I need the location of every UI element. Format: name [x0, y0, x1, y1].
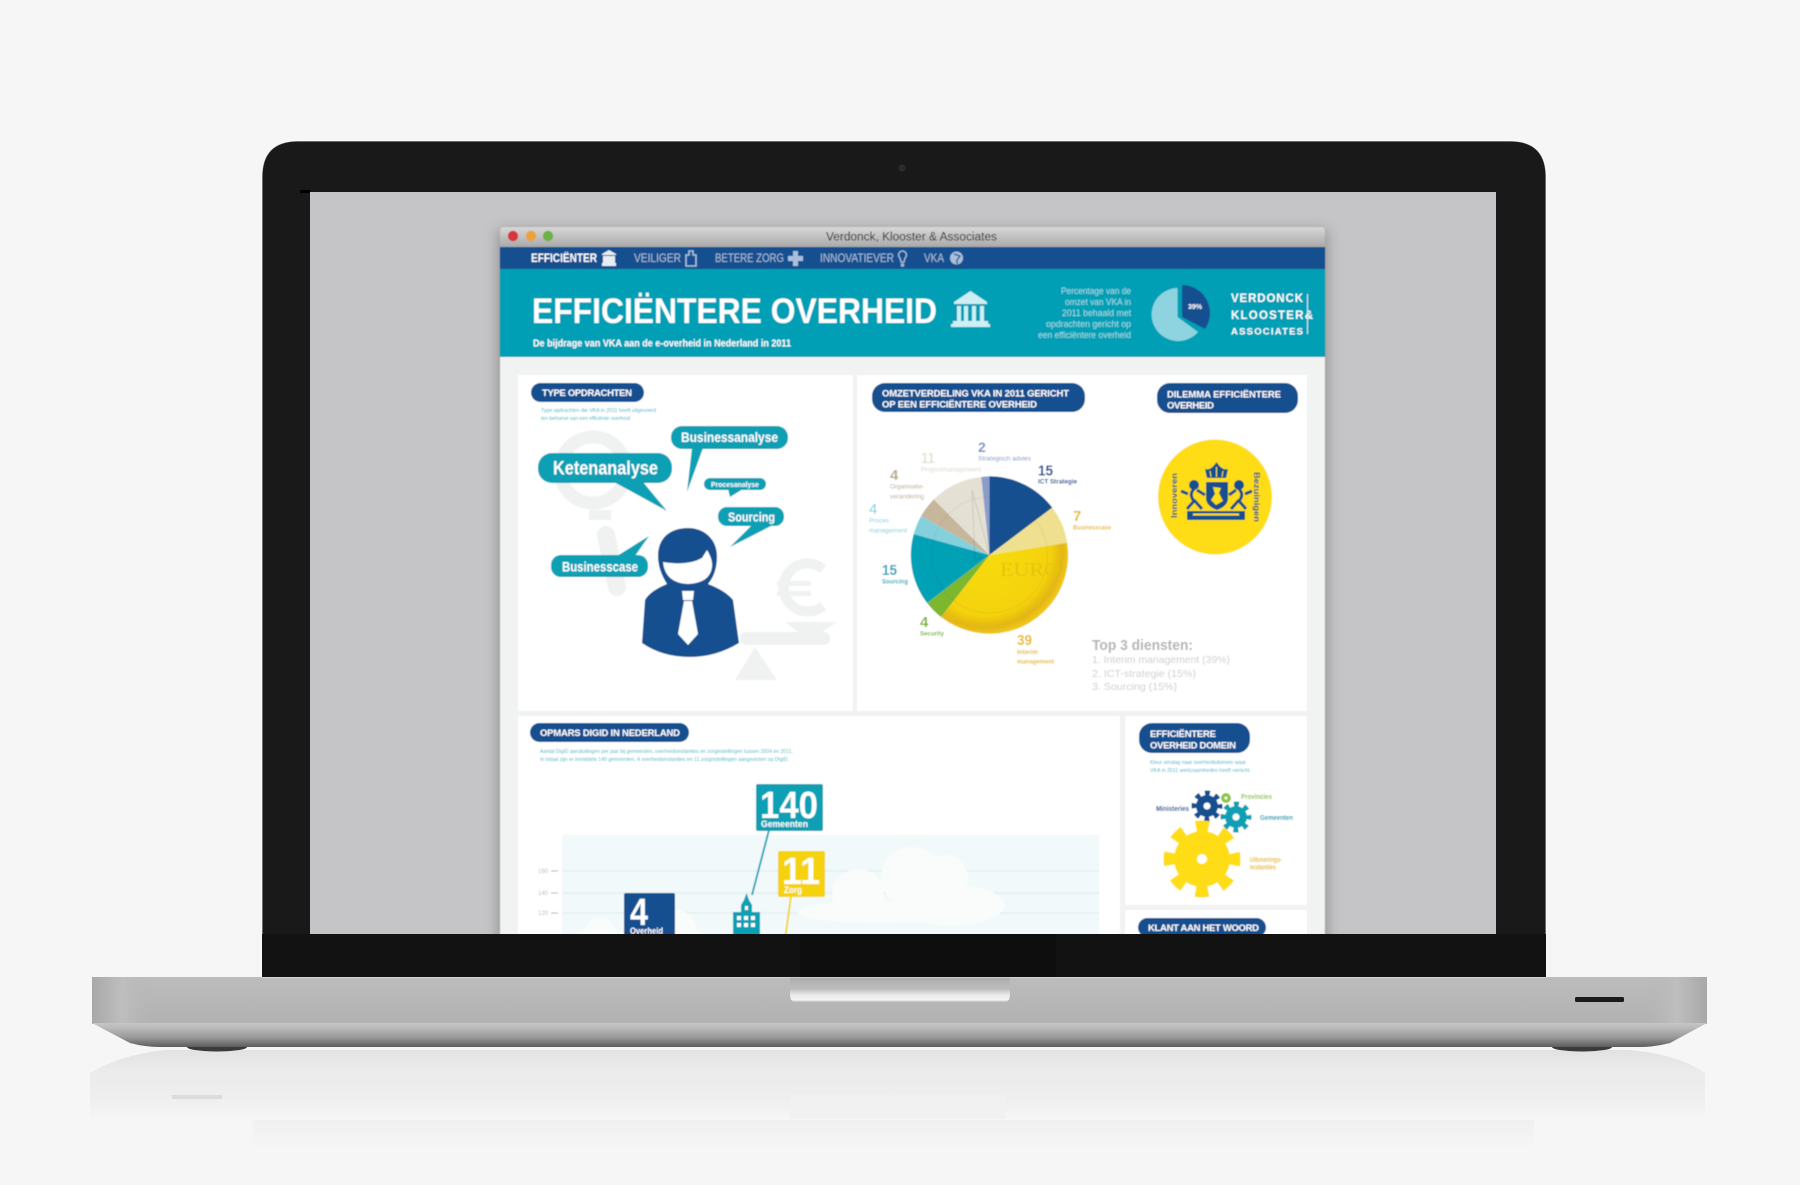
callout: 4 overheid — [624, 892, 675, 943]
callout: 4 overheid: 4 — [630, 892, 648, 934]
icon: gear yellow — [1170, 827, 1234, 891]
icon: gear teal — [1224, 804, 1248, 830]
axis labels — [538, 869, 558, 917]
icon: nav lock — [686, 251, 696, 266]
camera — [898, 164, 906, 172]
label: interim management — [1017, 632, 1055, 666]
heading pill: opmars digid — [530, 723, 689, 742]
navigation bar: VKA — [924, 253, 944, 265]
speech bubble: ketenanalyse: Ketenanalyse — [553, 458, 658, 480]
label: projectmanagement: 11 — [921, 450, 935, 467]
speech bubble: procesanalyse — [704, 478, 766, 497]
label: sourcing: Sourcing — [882, 578, 908, 586]
intro text: Aantal DigiD aansluitingen per jaar bij gemeenten, overheidsinstanties en zorginstellingen tussen 2004 en 2011. — [540, 749, 793, 755]
slice: sourcing — [911, 534, 990, 603]
slice: strategisch advies — [981, 476, 990, 555]
label: strategisch advies: 2 — [978, 439, 986, 455]
icon: nav globe — [950, 252, 963, 264]
callout: 11 zorg: Zorg — [784, 885, 802, 895]
callout: 11 zorg — [778, 851, 825, 940]
heading pill: domein: EFFICIËNTERE — [1150, 729, 1216, 740]
label: proces management: management — [869, 528, 907, 534]
icon: nav temple — [602, 250, 616, 266]
panel: omzetverdeling — [857, 375, 1307, 711]
top 3 services: 2. ICT-strategie (15%) — [1092, 668, 1196, 680]
percentage description: 2011 behaald met — [1062, 308, 1131, 318]
label: security: Security — [920, 630, 944, 638]
panel: efficiëntere overheid domein — [1125, 716, 1307, 905]
label: interim management: 39 — [1017, 632, 1032, 649]
label: businesscase: Businesscase — [1073, 524, 1111, 532]
slice: proces management — [914, 516, 990, 555]
navigation bar: BETERE ZORG — [715, 253, 784, 265]
label: proces management: Proces — [869, 518, 890, 524]
label: ICT strategie: ICT Strategie — [1038, 478, 1077, 486]
gear labels: Uitvoerings- — [1250, 855, 1282, 864]
gear labels: instanties — [1250, 862, 1276, 872]
browser window — [500, 227, 1325, 956]
heading pill: domein — [1139, 723, 1250, 753]
axis labels: 140 — [538, 891, 549, 897]
callout: 140 gemeenten — [752, 784, 823, 895]
label: businesscase — [1073, 508, 1111, 532]
label: ICT strategie: 15 — [1038, 462, 1053, 480]
window page background — [500, 356, 1326, 934]
header band — [500, 269, 1325, 357]
hinge notch — [790, 976, 1010, 1002]
logo: VERDONCK — [1231, 293, 1304, 305]
intro text: Kleur omslag naar overheidsdomein waar — [1150, 760, 1246, 766]
icon: nav bulb — [899, 251, 906, 266]
label: projectmanagement — [921, 450, 981, 474]
heading pill: omzetverdeling — [872, 383, 1085, 412]
title bar — [500, 227, 1325, 247]
label: businesscase: 7 — [1073, 508, 1081, 525]
speech bubble: procesanalyse: Procesanalyse — [711, 480, 759, 489]
intro text — [541, 408, 656, 422]
axis labels: 160 — [538, 869, 549, 875]
pie labels — [869, 439, 1111, 666]
lion right — [1229, 480, 1252, 509]
callout: 4 overheid: Overheid — [630, 926, 663, 936]
foot right — [1552, 1042, 1612, 1052]
slice: security — [927, 555, 990, 617]
pie chart: EURO — [1000, 559, 1060, 581]
speech bubble: businessanalyse — [671, 426, 788, 492]
speech bubble: sourcing — [718, 507, 784, 547]
label: organisatieverandering: Organisatie- — [890, 484, 924, 490]
slice: organisatieverandering — [921, 499, 990, 555]
speech bubble: businessanalyse: Businessanalyse — [681, 429, 778, 445]
screen — [300, 190, 1496, 950]
laptop bezel — [262, 141, 1546, 977]
heading pill: dilemma: OVERHEID — [1167, 400, 1214, 412]
heading pill: domein: OVERHEID DOMEIN — [1150, 740, 1236, 752]
callout: 140 gemeenten: Gemeenten — [761, 819, 808, 829]
speech bubble: ketenanalyse — [538, 453, 672, 511]
rotated text: bezuinigen: Bezuinigen — [1252, 472, 1261, 522]
speech bubble: sourcing: Sourcing — [728, 510, 775, 524]
label: interim management: management — [1017, 658, 1055, 666]
gear labels — [1156, 792, 1293, 872]
icon: building — [733, 893, 760, 940]
navigation bar: EFFICIËNTER — [531, 252, 598, 265]
panel: klant aan het woord — [1125, 910, 1307, 956]
background icon: magnifier — [560, 437, 626, 587]
percentage description: omzet van VKA in — [1065, 297, 1131, 307]
background icon: euro on scale — [735, 564, 837, 680]
label: sourcing — [882, 562, 908, 586]
clouds — [577, 847, 1005, 954]
heading pill: type opdrachten — [531, 383, 644, 402]
laptop reflection — [90, 1050, 1705, 1150]
heading pill: omzetverdeling: OP EEN EFFICIËNTERE OVERHEID — [882, 400, 1037, 410]
label: proces management: 4 — [869, 501, 877, 518]
label: organisatieverandering: 4 — [890, 467, 899, 484]
yellow seal: dilemma coat of arms — [1158, 440, 1272, 554]
label: ICT strategie — [1038, 462, 1077, 486]
icon: gear green — [1221, 793, 1231, 803]
speech bubble: businesscase — [551, 536, 649, 577]
heading pill: klant aan het woord — [1138, 918, 1266, 937]
icon: temple — [951, 291, 990, 327]
label: organisatieverandering — [890, 467, 924, 500]
label: security: 4 — [920, 614, 929, 631]
slice: ICT strategie — [990, 476, 1052, 555]
top 3 services — [1092, 637, 1230, 693]
label: sourcing: 15 — [882, 562, 897, 579]
axis labels: 120 — [538, 911, 549, 917]
crown — [1205, 462, 1228, 478]
top 3 services: 3. Sourcing (15%) — [1092, 681, 1177, 693]
top 3 services: 1. Interim management (39%) — [1092, 654, 1230, 666]
gear labels: Gemeenten — [1260, 813, 1293, 822]
mini pie chart 39 percent: 39% — [1188, 304, 1203, 311]
subtitle: De bijdrage van VKA aan de e-overheid in Nederland in 2011 — [533, 338, 791, 350]
logo: KLOOSTER& — [1231, 310, 1313, 322]
percentage description: Percentage van de — [1061, 286, 1131, 296]
laptop base — [92, 976, 1707, 1052]
lion left — [1181, 480, 1205, 509]
icon: gear blue — [1194, 794, 1220, 818]
intro text — [540, 749, 793, 763]
label: strategisch advies — [978, 439, 1032, 462]
slot — [1575, 997, 1624, 1002]
icon: person with tie — [642, 528, 739, 657]
percentage description: opdrachten gericht op — [1046, 319, 1131, 329]
ribbon — [1187, 511, 1245, 520]
navigation bar: VEILIGER — [634, 253, 681, 265]
mini pie chart 39 percent — [1152, 285, 1210, 341]
label: security — [920, 614, 944, 638]
percentage description: een efficiëntere overheid — [1038, 330, 1131, 340]
intro text: ten behoeve van een efficiënte overheid — [541, 416, 630, 422]
callout: 140 gemeenten: 140 — [760, 785, 818, 827]
shield — [1206, 482, 1228, 510]
slice: projectmanagement — [934, 477, 990, 555]
foot left — [187, 1042, 247, 1052]
intro text: In totaal zijn er inmiddels 140 gemeenten, 4 overheidsinstanties en 11 zorginstellingen aangesloten op DigiD. — [540, 757, 789, 763]
gear labels: Ministeries — [1156, 804, 1189, 813]
navigation bar: INNOVATIEVER — [820, 253, 894, 265]
panel: type opdrachten — [518, 375, 853, 711]
pie chart — [911, 476, 1068, 634]
percentage description — [1038, 286, 1131, 340]
label: interim management: Interim — [1017, 649, 1038, 656]
speech bubble: businesscase: Businesscase — [562, 560, 638, 574]
slice: interim management — [941, 543, 1068, 634]
icon: nav cross — [788, 251, 803, 266]
heading pill: klant aan het woord: KLANT AAN HET WOORD — [1148, 923, 1259, 934]
rotated text: innoveren: Innoveren — [1170, 473, 1179, 518]
label: strategisch advies: Strategisch advies — [978, 456, 1032, 462]
heading: EFFICIËNTERE OVERHEID — [532, 292, 937, 331]
logo — [1231, 293, 1313, 338]
navigation bar — [500, 247, 1325, 269]
label: projectmanagement: Projectmanagement — [921, 466, 981, 474]
heading pill: dilemma — [1157, 383, 1298, 413]
callout: 11 zorg: 11 — [782, 851, 820, 893]
gear labels: Provincies — [1241, 792, 1272, 801]
label: organisatieverandering: verandering — [890, 494, 924, 500]
slice: businesscase — [990, 508, 1067, 555]
title bar: Verdonck, Klooster & Associates — [826, 232, 997, 244]
heading pill: opmars digid: OPMARS DIGID IN NEDERLAND — [540, 728, 680, 739]
intro text: VKA in 2011 werkzaamheden heeft verricht. — [1150, 768, 1251, 774]
label: proces management — [869, 501, 907, 534]
top 3 services: Top 3 diensten: — [1092, 637, 1193, 654]
heading pill: type opdrachten: TYPE OPDRACHTEN — [542, 388, 632, 399]
logo: ASSOCIATES — [1231, 326, 1303, 338]
panel: opmars digid — [518, 716, 1120, 956]
heading pill: dilemma: DILEMMA EFFICIËNTERE — [1167, 390, 1281, 400]
heading pill: omzetverdeling: OMZETVERDELING VKA IN 2011 GERICHT — [882, 388, 1069, 400]
intro text: Type opdrachten die VKA in 2011 heeft uitgevoerd — [541, 408, 656, 414]
area chart background — [538, 835, 1099, 954]
intro text — [1150, 760, 1251, 774]
base lower lip — [92, 1023, 1707, 1047]
